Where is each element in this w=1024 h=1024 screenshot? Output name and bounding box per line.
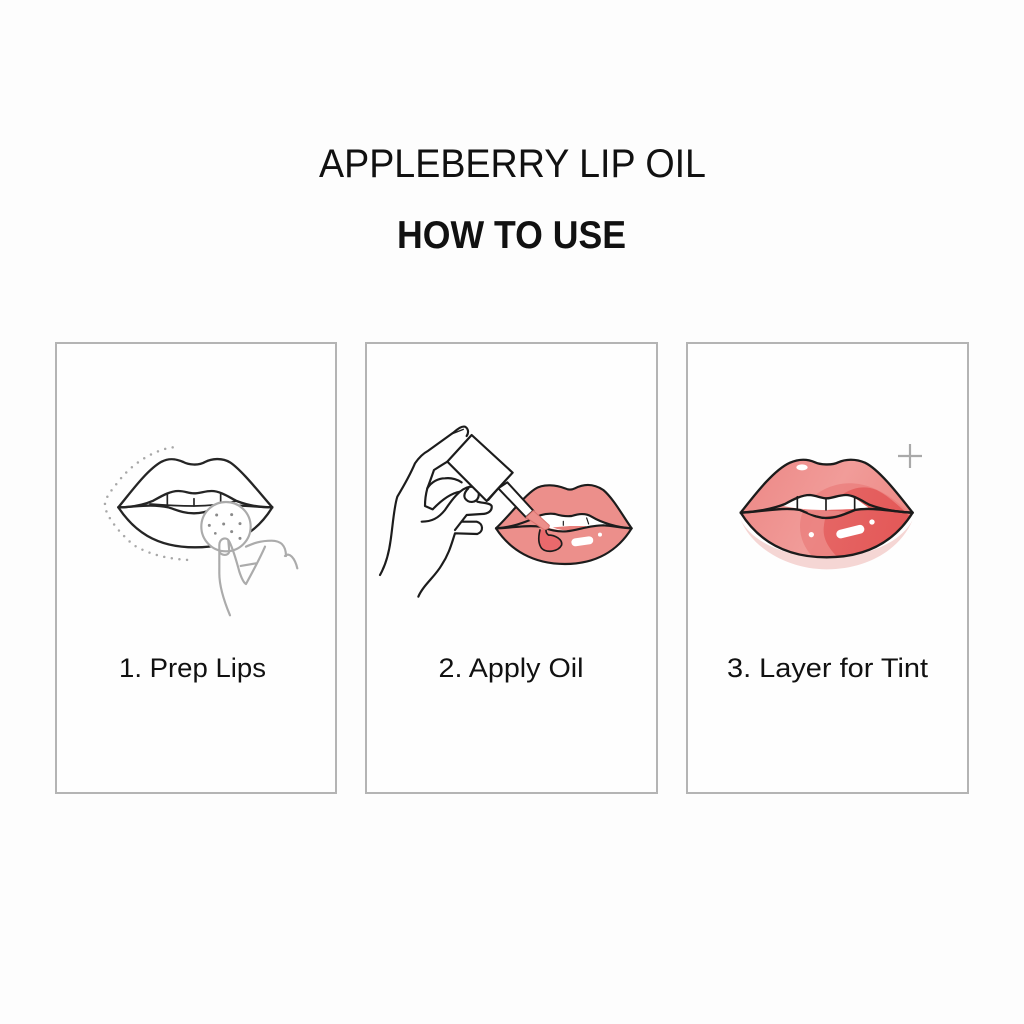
icon: round pad (201, 502, 251, 551)
title: APPLEBERRY LIP OIL (319, 142, 706, 186)
step 1 label: 1. Prep Lips (119, 653, 266, 683)
deeper tint area (800, 483, 910, 556)
lip lines (741, 460, 913, 557)
lips fill (741, 460, 913, 557)
icon: plus sparkle (898, 444, 922, 468)
hand outline (380, 427, 468, 575)
step 2 label: 2. Apply Oil (438, 653, 584, 683)
oil drop (539, 529, 562, 551)
soft shadow (741, 520, 913, 569)
panel: step 3 layer for tint (687, 343, 968, 793)
gloss highlights (796, 464, 808, 470)
icon: gray finger (219, 538, 297, 615)
dropper cap (447, 435, 513, 501)
panel: step 1 prep lips (56, 343, 336, 793)
icon: tinted glossy lips (741, 460, 913, 569)
step 3 label: 3. Layer for Tint (727, 653, 929, 683)
applicator stick (498, 482, 533, 517)
gloss highlights (571, 536, 594, 547)
icon: hand applying oil to lips (380, 427, 632, 597)
icon: lips with exfoliating pad (105, 447, 297, 615)
subtitle: how to use: HOW TO USE (397, 214, 626, 257)
teeth (783, 495, 868, 510)
panel: step 2 apply oil (366, 343, 657, 793)
pad dots (208, 513, 241, 540)
lips pink (496, 485, 632, 564)
